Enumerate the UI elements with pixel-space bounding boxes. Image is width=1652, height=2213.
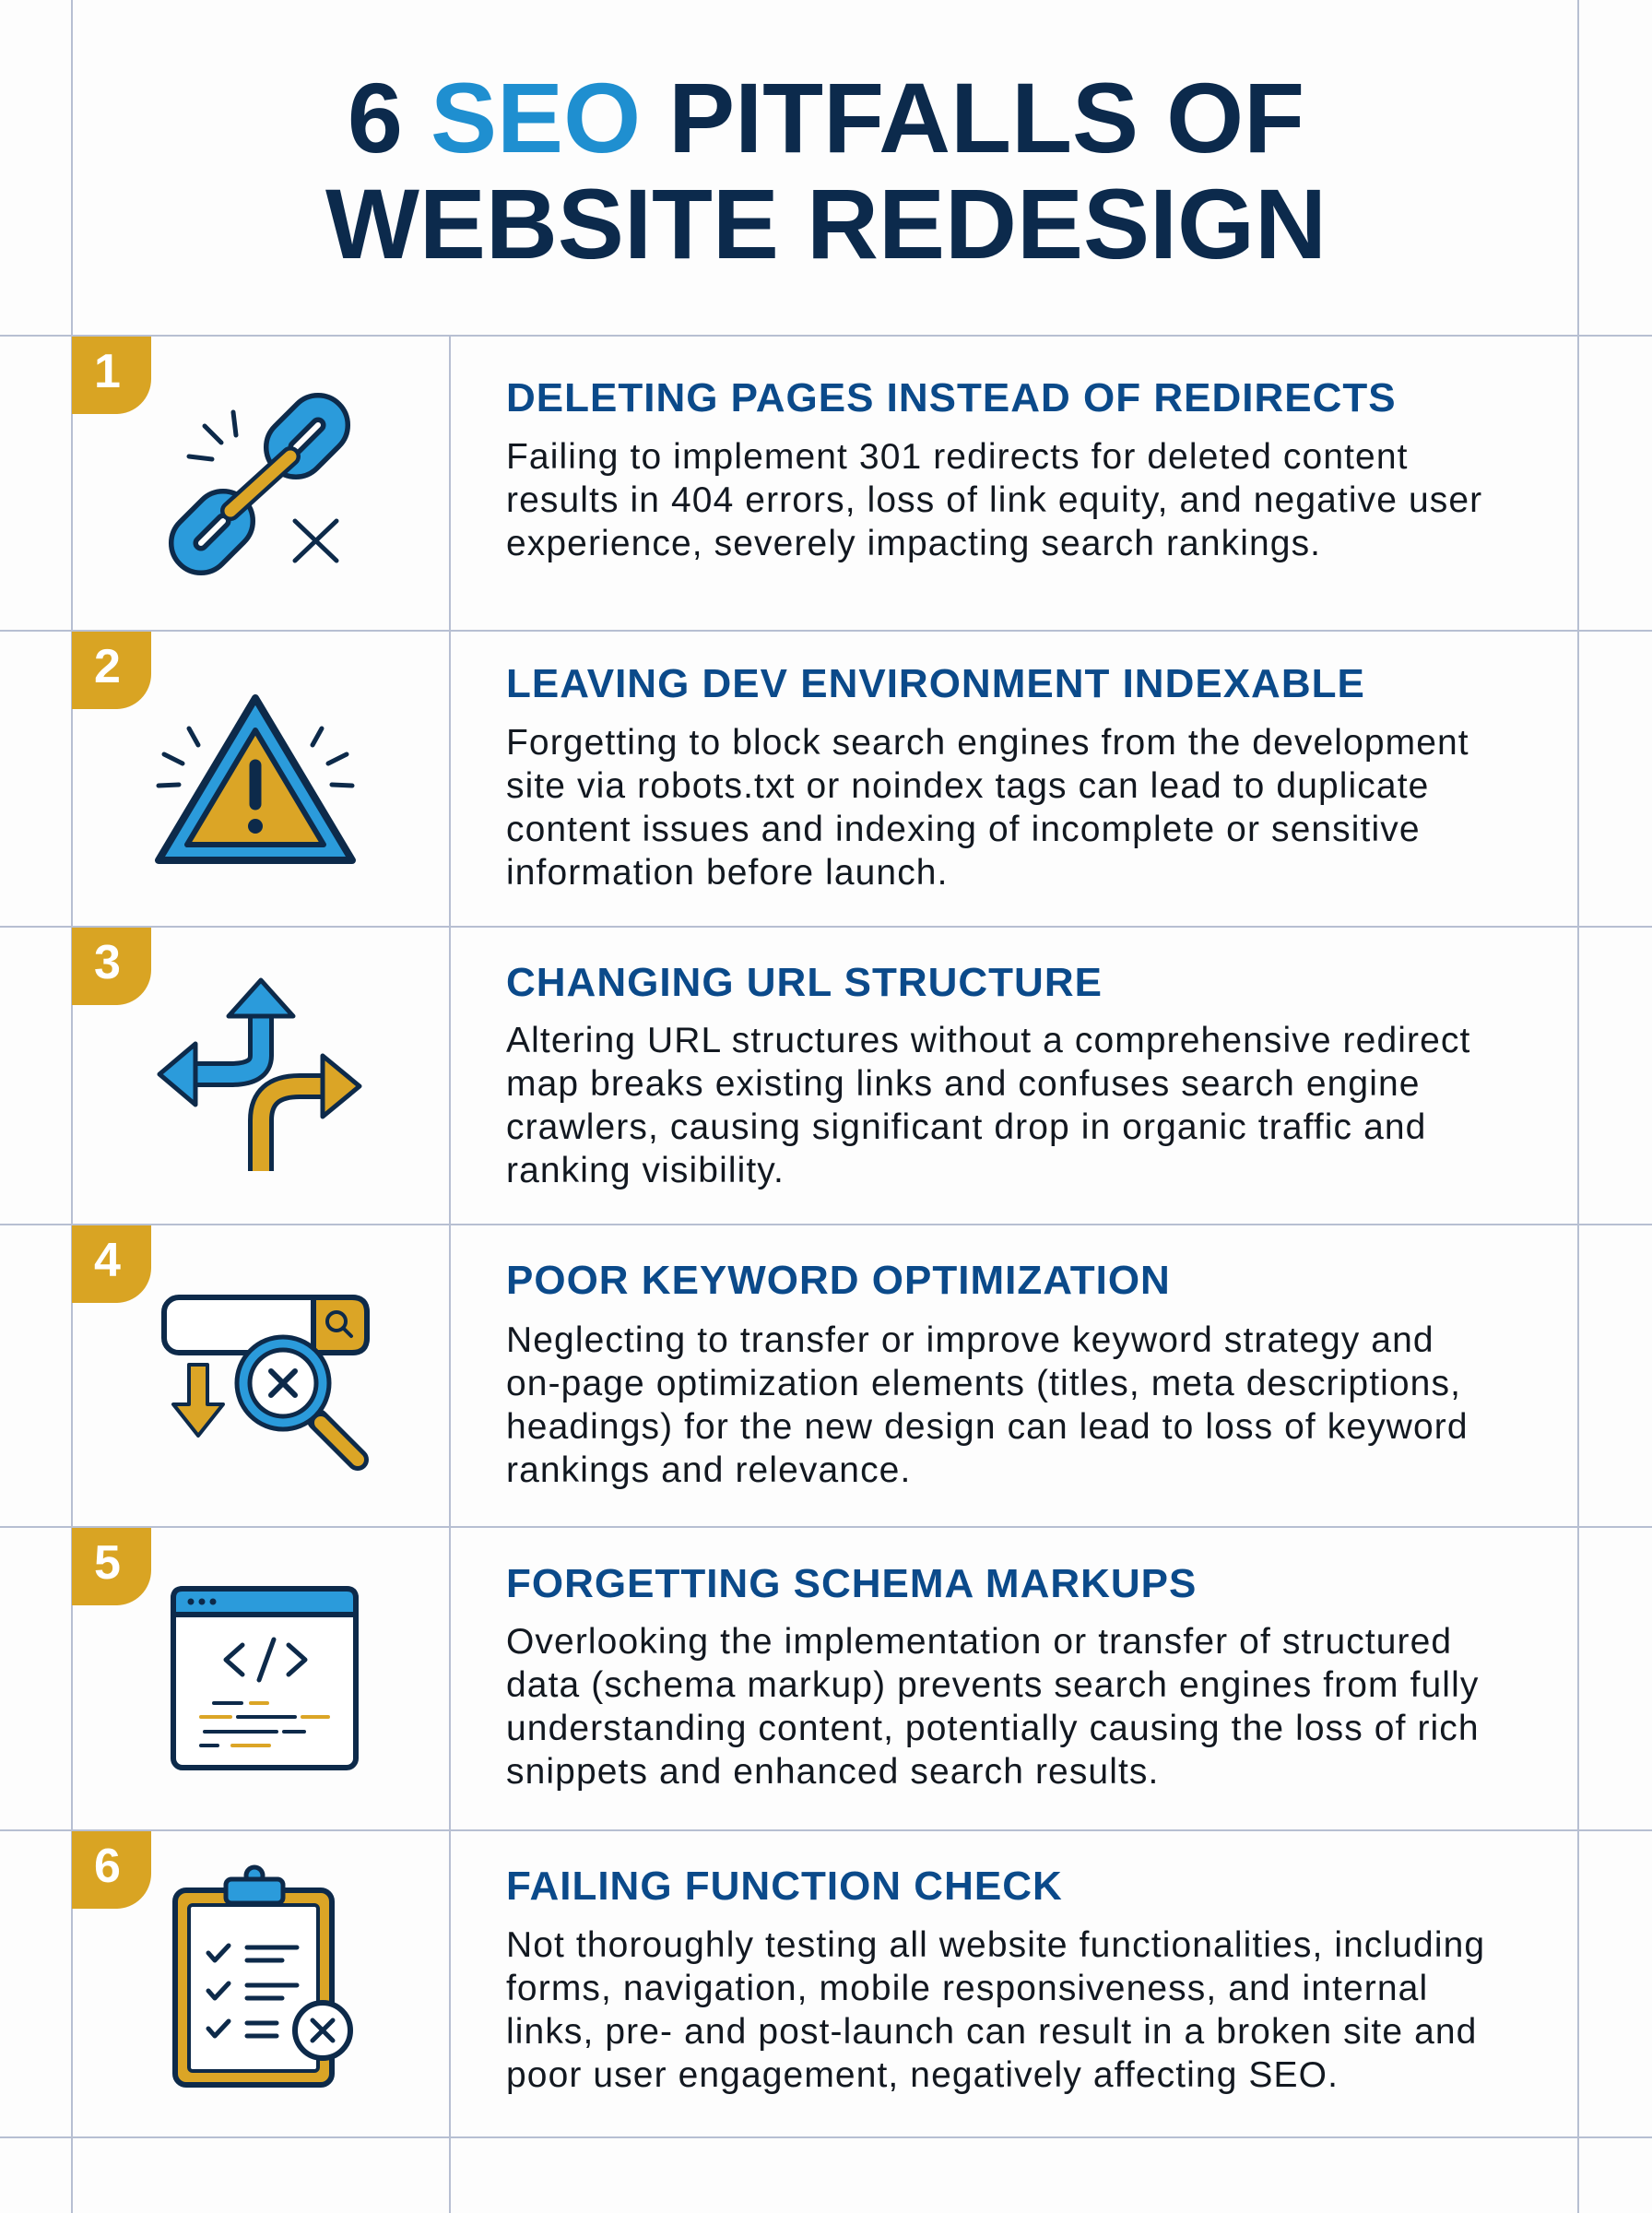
heading 2: LEAVING DEV ENVIRONMENT INDEXABLE xyxy=(506,661,1365,706)
text 6: poor user engagement, negatively affecting SEO. xyxy=(506,2055,1339,2095)
text 2: content issues and indexing of incomplete or sensitive xyxy=(506,810,1421,849)
text 3: ranking visibility. xyxy=(506,1151,785,1190)
badge 3 xyxy=(72,928,151,1005)
text 1: experience, severely impacting search rankings. xyxy=(506,524,1321,563)
title: WEBSITE REDESIGN xyxy=(325,168,1327,279)
badge 2: 2 xyxy=(94,640,121,693)
heading 6: FAILING FUNCTION CHECK xyxy=(506,1864,1063,1909)
text 4: Neglecting to transfer or improve keyword strategy and xyxy=(506,1320,1434,1360)
text 4 xyxy=(506,1320,1469,1490)
badge 1: 1 xyxy=(94,345,121,398)
text 6 xyxy=(506,1925,1485,2095)
badge 5: 5 xyxy=(94,1536,121,1590)
badge 5 xyxy=(72,1528,151,1605)
badge 1 xyxy=(72,337,151,414)
icon: diverging arrows xyxy=(159,980,360,1171)
text 1 xyxy=(506,437,1482,563)
text 5: data (schema markup) prevents search engines from fully xyxy=(506,1665,1479,1705)
text 6: links, pre- and post-launch can result in a broken site and xyxy=(506,2012,1477,2052)
heading 4: POOR KEYWORD OPTIMIZATION xyxy=(506,1258,1171,1303)
heading 3: CHANGING URL STRUCTURE xyxy=(506,960,1103,1005)
text 2: information before launch. xyxy=(506,853,949,893)
text 6: Not thoroughly testing all website functionalities, including xyxy=(506,1925,1485,1965)
badge 6 xyxy=(72,1831,151,1909)
icon: broken chain xyxy=(176,400,343,568)
icon: search keyword xyxy=(164,1297,367,1460)
text 5: understanding content, potentially causing the loss of rich xyxy=(506,1709,1480,1748)
text 5: snippets and enhanced search results. xyxy=(506,1752,1159,1792)
heading 5: FORGETTING SCHEMA MARKUPS xyxy=(506,1561,1197,1606)
text 3 xyxy=(506,1021,1470,1190)
text 3: crawlers, causing significant drop in organic traffic and xyxy=(506,1107,1426,1147)
text 1: Failing to implement 301 redirects for deleted content xyxy=(506,437,1409,477)
icon: code window xyxy=(173,1589,356,1768)
badge 4: 4 xyxy=(94,1234,121,1287)
text 2: Forgetting to block search engines from the development xyxy=(506,723,1469,763)
badge 4 xyxy=(72,1225,151,1303)
text 6: forms, navigation, mobile responsiveness, and internal xyxy=(506,1969,1428,2008)
text 2 xyxy=(506,723,1469,893)
title: 6 SEO PITFALLS OF xyxy=(348,62,1304,173)
text 4: headings) for the new design can lead to loss of keyword xyxy=(506,1407,1469,1447)
text 5: Overlooking the implementation or transfer of structured xyxy=(506,1622,1452,1662)
text 4: on-page optimization elements (titles, meta descriptions, xyxy=(506,1364,1461,1403)
text 2: site via robots.txt or noindex tags can lead to duplicate xyxy=(506,766,1429,806)
text 5 xyxy=(506,1622,1480,1792)
badge 2 xyxy=(72,632,151,709)
text 3: map breaks existing links and confuses search engine xyxy=(506,1064,1421,1104)
text 4: rankings and relevance. xyxy=(506,1450,911,1490)
badge 6: 6 xyxy=(94,1840,121,1893)
title xyxy=(325,62,1327,279)
icon: clipboard xyxy=(175,1867,350,2085)
icon: warning triangle xyxy=(159,698,352,860)
text 3: Altering URL structures without a comprehensive redirect xyxy=(506,1021,1470,1060)
badge 3: 3 xyxy=(94,936,121,989)
text 1: results in 404 errors, loss of link equity, and negative user xyxy=(506,480,1482,520)
heading 1: DELETING PAGES INSTEAD OF REDIRECTS xyxy=(506,375,1397,420)
